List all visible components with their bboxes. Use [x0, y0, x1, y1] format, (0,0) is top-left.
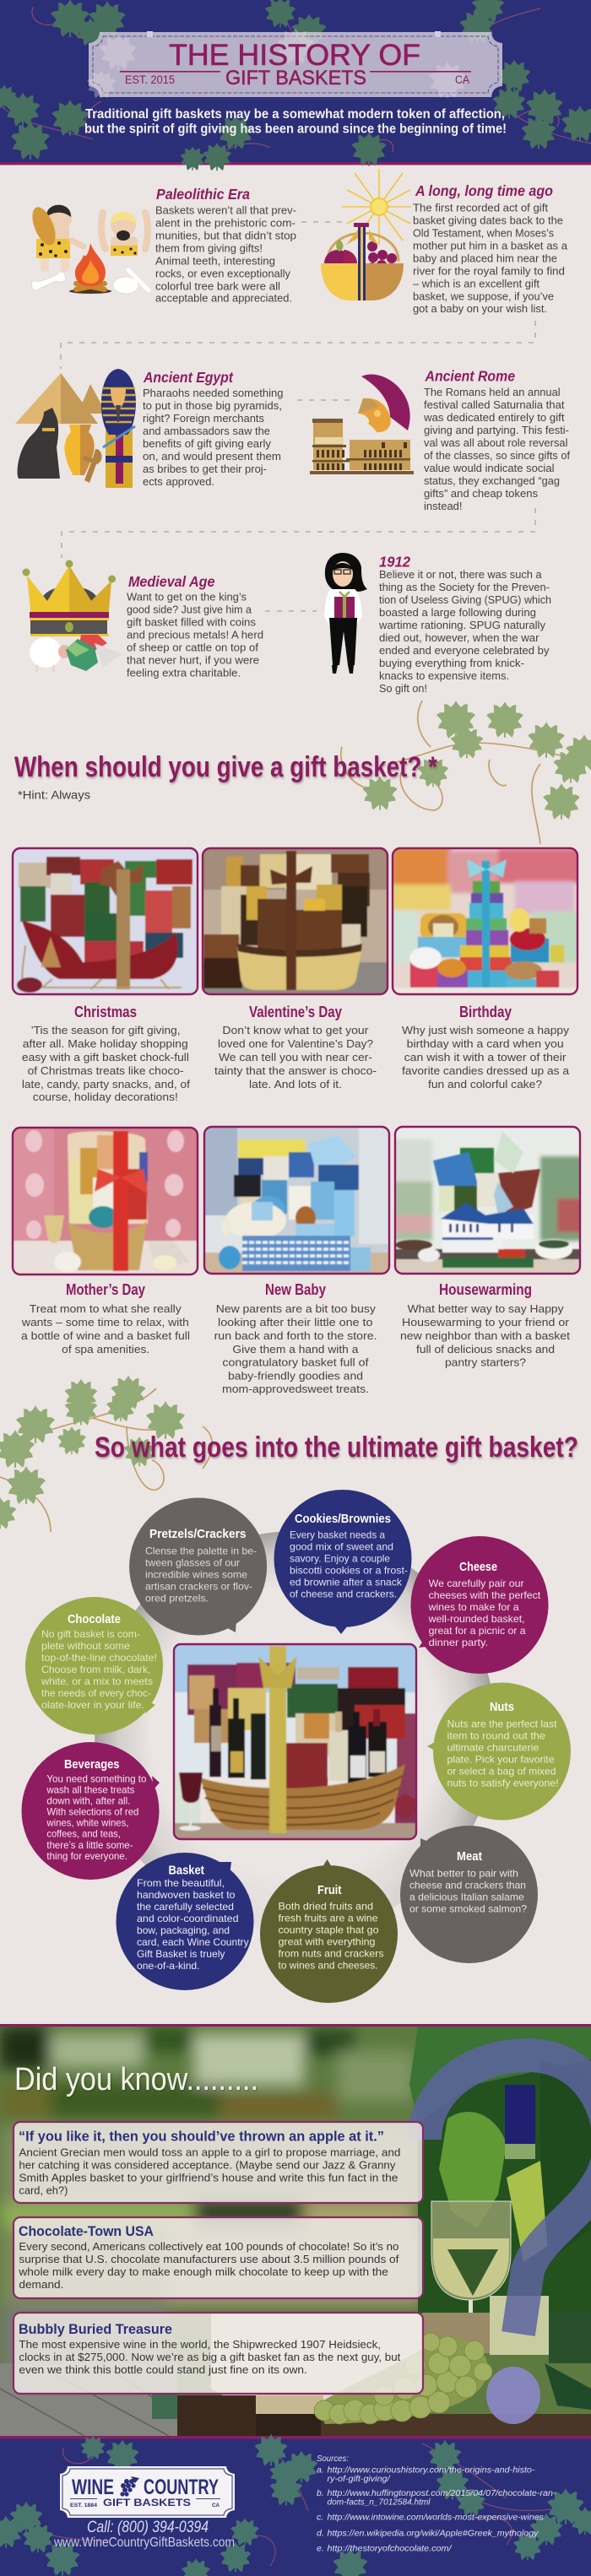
bubble: Chocolate: white, or a mix to meets	[41, 1675, 153, 1687]
text: Medieval Age: Medieval Age	[128, 573, 215, 590]
text: Christmas copy: ’Tis the season for gift giving,	[31, 1024, 181, 1036]
bubble: Pretzels/Crackers	[129, 1497, 267, 1636]
photo: vineyard background	[0, 2027, 591, 2439]
bubble: Meat: a delicious Italian salame	[409, 1891, 524, 1902]
fact card: wine: The most expensive wine in the world, the Shipwrecked 1907 Heidsieck,	[19, 2338, 381, 2351]
photo frame	[174, 1644, 416, 1839]
text: New Baby copy: New parents are a bit too busy	[216, 1302, 376, 1315]
intro text: but the spirit of gift giving has been around since the beginning of time!	[84, 122, 507, 137]
bubble: Basket: the carefully selected	[137, 1901, 234, 1913]
hint text: *Hint: Always	[18, 788, 90, 802]
caption: Christmas: Christmas	[74, 1003, 137, 1020]
bubble: Chocolate: Chocolate	[68, 1612, 121, 1626]
caption: New Baby: New Baby	[265, 1280, 327, 1298]
bubble: Beverages: coffees, and teas,	[46, 1828, 121, 1840]
icon: woman holding gift	[324, 553, 367, 674]
bubble: Cheese: Cheese	[459, 1560, 497, 1574]
icon: cavemen and fire	[28, 204, 149, 294]
panel: header	[0, 0, 591, 170]
text: Ancient Rome: instead!	[424, 501, 463, 512]
text: Christmas copy: of Christmas treats like choco-	[28, 1064, 184, 1077]
sources list: http://www.intowine.com/worlds-most-expensive-wines	[328, 2513, 545, 2523]
fact card: chocolate: whole milk every day to make enough milk chocolate to keep up with the	[18, 2265, 388, 2278]
title text	[120, 39, 471, 89]
bubble: Beverages: wines, white wines,	[46, 1817, 128, 1829]
text: Birthday copy: Why just wish someone a happy	[402, 1024, 570, 1036]
text: New Baby copy: run back and forth to the store.	[214, 1329, 377, 1342]
text: Ancient Rome: Ancient Rome	[425, 368, 515, 385]
bubble: Basket: bow, packaging, and	[137, 1924, 230, 1936]
text: Housewarming copy: pantry starters?	[445, 1356, 526, 1369]
text: Valentine's copy: loved one for Valentine’s Day?	[218, 1037, 373, 1050]
bubble: Meat	[400, 1826, 538, 1963]
bubble: Cheese: wines to make for a	[428, 1601, 519, 1613]
text: A long, long time ago: – which is an excellent gift	[413, 278, 540, 290]
foliage and wine bottle	[409, 2027, 591, 2363]
fact card: apple: her catching it was considered acceptance. (Maybe send our Jazz & Granny	[19, 2158, 396, 2171]
bubble: Beverages: Beverages	[64, 1757, 120, 1772]
logo plate: WINE	[72, 2476, 114, 2499]
text: Christmas copy: course, holiday decorations!	[33, 1090, 178, 1103]
bubble: Pretzels/Crackers: Clense the palette in be-	[145, 1545, 257, 1557]
bubble: Chocolate: No gift basket is com-	[41, 1628, 140, 1640]
contact phone: Call: (800) 394-0394	[87, 2519, 209, 2536]
campfire	[69, 243, 111, 294]
text: Mother's Day copy: a bottle of wine and a basket full	[21, 1329, 190, 1342]
bubble: Fruit	[260, 1859, 398, 2003]
bubble: Cookies/Brownies: ed brownie after a snack	[290, 1577, 403, 1588]
bubble: Cheese: great for a picnic or a	[429, 1625, 526, 1637]
text: Ancient Rome: giving and partying. This festi-	[424, 425, 569, 436]
text: Ancient Rome: was dedicated entirely to gift	[423, 412, 565, 424]
text: New Baby copy: baby-friendly goodies and	[228, 1370, 363, 1383]
text: 1912: wartime rationing. SPUG naturally	[378, 620, 546, 631]
bubble: Cheese: We carefully pair our	[429, 1578, 524, 1589]
bubble: Fruit: great with everything	[279, 1936, 375, 1948]
bubble: Beverages: You need something to	[46, 1773, 147, 1785]
bubble: Chocolate: the needs of every choc-	[41, 1687, 151, 1699]
text: 1912: buying everything from knick-	[379, 658, 524, 669]
bubble: Fruit: fresh fruits are a wine	[279, 1913, 378, 1924]
text: Ancient Rome: of the classes, so since gifts of	[424, 450, 571, 462]
text: Medieval Age: that never hurt, if you were	[127, 655, 259, 667]
top divider	[0, 2024, 591, 2027]
panel: ultimate basket diagram	[22, 1490, 571, 2003]
fact card: apple: Ancient Grecian men would toss an apple to a girl to propose marriage, and	[19, 2146, 400, 2158]
text: Housewarming copy: What better way to say Happy	[408, 1302, 564, 1315]
title text: THE HISTORY OF	[169, 39, 420, 72]
text: Birthday copy	[402, 1024, 570, 1090]
text: Ancient Rome: festival called Saturnalia that	[424, 399, 565, 411]
decorative vines on navy	[17, 2443, 574, 2566]
caption: Mother's Day: Mother’s Day	[66, 1280, 146, 1298]
text: Ancient Egypt: on, and would present them	[143, 451, 281, 463]
text: Birthday copy: birthday with a card when you	[407, 1037, 564, 1050]
fact card: apple: Smith Apples basket to your girlfriend’s house and write this fun fact in the	[19, 2171, 398, 2184]
text: Paleolithic Era	[155, 186, 296, 305]
text: Christmas copy: late, candy, party snacks, and, of	[22, 1078, 190, 1090]
timeline dashed connectors	[61, 222, 535, 611]
text: Paleolithic Era: Baskets weren’t all that prev-	[155, 204, 296, 216]
bubble: Cookies/Brownies: savory. Enjoy a couple	[290, 1553, 390, 1565]
bubble: Fruit: to wines and cheeses.	[279, 1960, 378, 1972]
text: A long, long time ago: got a baby on your wish list.	[413, 303, 547, 315]
bubble: Meat: Meat	[457, 1849, 482, 1864]
bubble: Basket: one-of-a-kind.	[137, 1960, 199, 1972]
contact website: www.WineCountryGiftBaskets.com	[53, 2535, 235, 2550]
text: Ancient Rome: The Romans held an annual	[424, 387, 561, 398]
text: 1912	[378, 554, 551, 695]
photo: central wine and gourmet basket	[173, 1643, 418, 1840]
sources list: http://www.huffingtonpost.com/2015/04/07/chocolate-ran-	[328, 2488, 556, 2498]
icon: crown, sheep and gems	[22, 560, 122, 672]
bubble: Cookies/Brownies: of cheese and crackers.	[290, 1588, 397, 1600]
title text: CA	[455, 73, 469, 86]
bubble: Basket: Basket	[169, 1864, 204, 1878]
text: Ancient Rome	[423, 368, 571, 512]
photo frame	[203, 848, 388, 994]
sources list: e.	[317, 2544, 324, 2554]
bubble: Cookies/Brownies: good mix of sweet and	[290, 1541, 393, 1553]
bubble: Beverages: there’s a little some-	[46, 1839, 133, 1851]
caption: Housewarming: Housewarming	[439, 1280, 532, 1298]
sources list: c.	[317, 2513, 323, 2523]
bubble: Nuts: Nuts are the perfect last	[447, 1718, 557, 1730]
text: Housewarming copy	[400, 1302, 570, 1369]
text: Medieval Age: feeling extra charitable.	[127, 668, 241, 679]
sources list: d.	[317, 2528, 324, 2538]
fact card: apple: card, eh?)	[19, 2184, 68, 2196]
fact card: apple: “If you like it, then you should’ve thrown an apple at it.”	[19, 2129, 384, 2145]
grapes	[314, 2333, 492, 2424]
text: Valentine's copy: late. And lots of it.	[249, 1078, 342, 1090]
text: A long, long time ago: The first recorded act of gift	[413, 203, 549, 214]
question mark overlay	[425, 2055, 591, 2334]
photo frame	[13, 848, 198, 994]
text: Mother's Day copy	[21, 1302, 190, 1356]
bubble: Meat: cheese and crackers than	[409, 1879, 526, 1891]
fact card: wine	[14, 2313, 423, 2394]
intro text: Traditional gift baskets may be a somewhat modern token of affection,	[85, 107, 505, 122]
text: Ancient Egypt: Pharaohs needed something	[143, 387, 284, 399]
photo: Christmas sleigh	[12, 847, 199, 996]
text: Ancient Rome: status, they exchanged “gag	[424, 475, 560, 487]
text: Medieval Age: gift basket filled with coins	[127, 617, 256, 629]
text: 1912: knacks to expensive items.	[379, 670, 509, 682]
sources list: b.	[317, 2488, 324, 2498]
decorative vines on navy	[0, 0, 591, 162]
wine glass	[431, 2201, 511, 2313]
sources list: ry-of-gift-giving/	[328, 2474, 391, 2484]
bubble: Chocolate: olate-lover in your life.	[41, 1699, 144, 1711]
bubble: Meat: or some smoked salmon?	[409, 1902, 527, 1914]
sources list: http://thestoryofchocolate.com/	[328, 2544, 453, 2554]
text: Medieval Age: of sheep or cattle on top of	[127, 642, 259, 654]
bubble: Basket: Gift Basket is truely	[137, 1948, 225, 1960]
text: Christmas copy	[22, 1024, 190, 1103]
text: 1912: tion of Useless Giving (SPUG) which	[379, 594, 551, 606]
caption: Valentine's Day: Valentine’s Day	[249, 1003, 343, 1020]
text: Christmas copy: after all. Make holiday shopping	[23, 1037, 188, 1050]
text: A long, long time ago: basket, we suppose, if you’ve	[413, 290, 554, 302]
fact card: chocolate: Chocolate-Town USA	[19, 2223, 154, 2239]
text: Ancient Egypt	[143, 369, 284, 488]
text: Paleolithic Era: colorful tree bark were all	[155, 280, 280, 292]
text: 1912: thing as the Society for the Preven-	[379, 582, 550, 593]
text: Paleolithic Era: munities, but that didn’t stop	[155, 230, 296, 241]
panel: history timeline	[15, 169, 571, 695]
bubble: Nuts: or select a bag of mixed	[447, 1766, 556, 1778]
bubble: Nuts: item to round out the	[447, 1730, 545, 1742]
fact card: wine: even we think this bottle could stand just fine on its own.	[19, 2363, 307, 2376]
ring shadow behind bubbles	[84, 1531, 507, 1941]
text: Paleolithic Era: them from giving gifts!	[155, 242, 263, 254]
text: Ancient Rome: val was all about role reversal	[424, 437, 567, 449]
text: Ancient Rome: value would indicate social	[424, 463, 554, 474]
text: New Baby copy: mom-approvedsweet treats.	[222, 1383, 369, 1395]
bubble: Fruit: country staple that go	[279, 1924, 379, 1936]
bubble: Pretzels/Crackers: Pretzels/Crackers	[149, 1527, 247, 1541]
panel: New Baby	[203, 1126, 391, 1395]
text: 1912: So gift on!	[379, 683, 427, 695]
text: New Baby copy	[214, 1302, 377, 1395]
bubble: Basket: From the beautiful,	[137, 1877, 225, 1889]
text: Ancient Egypt: to put in those big pyramids,	[143, 400, 282, 412]
text: Birthday copy: can wish it with a tower of their	[404, 1051, 567, 1063]
text: 1912: Believe it or not, there was such a	[379, 569, 542, 581]
icon: grape cluster	[120, 2476, 139, 2497]
panel: Housewarming	[394, 1126, 583, 1369]
caption: Birthday: Birthday	[459, 1003, 512, 1020]
text: Medieval Age: Want to get on the king’s	[127, 592, 247, 603]
text: Mother's Day copy: Treat mom to what she really	[30, 1302, 182, 1315]
fact card: apple	[14, 2122, 423, 2203]
purple flower over question-mark dot	[486, 2367, 540, 2424]
photo: Housewarming basket	[394, 1126, 583, 1274]
bubble: Beverages: With selections of red	[46, 1806, 138, 1818]
decorative vine top right	[341, 701, 591, 844]
title text: EST. 2015	[125, 73, 175, 86]
text: A long, long time ago: river for the royal family to find	[413, 265, 565, 277]
bubble: Cheese: cheeses with the perfect	[429, 1589, 541, 1601]
text: New Baby copy: congratulatory basket full of	[222, 1356, 369, 1369]
heading: When should you give a gift basket: When should you give a gift basket? *	[14, 751, 438, 783]
panel: Birthday	[392, 847, 583, 1090]
text: Paleolithic Era: rocks, or even exceptionally	[155, 268, 291, 279]
icon: Egypt pyramids, cat, vase, pharaoh	[15, 369, 136, 488]
text: Ancient Egypt: right? Foreign merchants	[143, 413, 264, 425]
bubble: Pretzels/Crackers: incredible wines some	[145, 1569, 247, 1581]
text: 1912: ended and everyone celebrated by	[379, 645, 550, 657]
bubble: Cookies/Brownies	[274, 1490, 412, 1634]
text: Housewarming copy: Housewarming to your friend or	[402, 1316, 570, 1329]
bubble: Cookies/Brownies: Every basket needs a	[290, 1529, 385, 1541]
photo frame	[393, 848, 577, 994]
bubble: Basket: and color-coordinated	[137, 1913, 238, 1924]
bubble: Pretzels/Crackers: ored pretzels.	[145, 1593, 209, 1605]
bubble: Basket: handwoven basket to	[137, 1889, 236, 1901]
text: Medieval Age	[127, 573, 263, 679]
bones and rock	[31, 270, 149, 294]
text: Paleolithic Era: alent in the prehistoric com-	[155, 217, 296, 229]
text: A long, long time ago: Old Testament, when Moses’s	[413, 228, 554, 240]
panel: Valentine's Day	[202, 847, 389, 1090]
text: Valentine's copy	[214, 1024, 377, 1090]
bubble: Beverages: wash all these treats	[46, 1784, 134, 1796]
bubble: Pretzels/Crackers: tween glasses of our	[145, 1557, 240, 1569]
text: New Baby copy: looking after their little one to	[218, 1316, 373, 1329]
text: Medieval Age: and precious metals! A herd	[127, 630, 263, 641]
text: Ancient Egypt: ects approved.	[143, 476, 214, 488]
bubble: Fruit: Fruit	[317, 1883, 342, 1897]
sources list: dom-facts_n_7012584.html	[328, 2497, 431, 2507]
text: Ancient Rome: gifts” and cheap tokens	[424, 488, 538, 500]
text: A long, long time ago: basket giving dates back to the	[413, 215, 563, 227]
bubble: Cookies/Brownies: Cookies/Brownies	[295, 1512, 391, 1526]
bubble: Nuts: nuts to satisfy everyone!	[447, 1778, 559, 1789]
bubble: Fruit: Both dried fruits and	[279, 1901, 373, 1913]
text: Mother's Day copy: of spa amenities.	[62, 1343, 149, 1356]
text: A long, long time ago: mother put him in a basket as a	[413, 241, 567, 252]
sources list	[317, 2454, 556, 2554]
icon: basket with sun	[321, 169, 411, 300]
logo plate	[60, 2466, 235, 2518]
photo: birthday tower	[392, 847, 583, 996]
sources list: Sources:	[317, 2454, 349, 2464]
text: Birthday copy: fun and colorful cake?	[428, 1078, 542, 1090]
text: 1912: 1912	[379, 554, 410, 571]
logo plate: COUNTRY	[144, 2476, 219, 2499]
fact card: chocolate: surprise that U.S. chocolate manufacturers use about 3.5 million pounds of	[19, 2253, 399, 2265]
sources list: https://en.wikipedia.org/wiki/Apple#Greek_mythology	[328, 2528, 539, 2538]
text: Valentine's copy: Don’t know what to get your	[222, 1024, 369, 1036]
logo plate: CA	[212, 2503, 220, 2508]
text: Medieval Age: good side? Just give him a	[127, 604, 252, 616]
decorative vine left	[0, 1375, 212, 1532]
text: Mother's Day copy: wants – some time to relax, with	[21, 1316, 189, 1329]
panel: Christmas	[12, 847, 199, 1103]
logo plate: EST. 1884	[70, 2503, 98, 2508]
bubble: Cheese	[410, 1536, 549, 1674]
caveman with club	[28, 204, 84, 272]
text: Paleolithic Era: Paleolithic Era	[156, 186, 250, 203]
text: Ancient Egypt: Ancient Egypt	[143, 369, 234, 386]
bubble: Cheese: well-rounded basket,	[428, 1613, 525, 1625]
text: A long, long time ago	[413, 182, 567, 315]
bubble: Beverages: thing for everyone.	[46, 1850, 127, 1862]
text: Birthday copy: favorite candies dressed up as a	[402, 1064, 570, 1077]
intro text	[84, 107, 507, 137]
text: Ancient Egypt: benefits of gift giving early	[143, 438, 272, 450]
title plate	[87, 28, 502, 98]
bubble: Fruit: from nuts and crackers	[279, 1948, 383, 1960]
bubble: Meat: What better to pair with	[409, 1867, 518, 1879]
text: 1912: boasted a large following during	[379, 607, 536, 619]
panel: footer	[0, 2434, 591, 2576]
fact card: chocolate: demand.	[19, 2278, 63, 2291]
bubble: Nuts: ultimate charcuterie	[447, 1742, 539, 1754]
bubble: Chocolate: top-of-the-line chocolate!	[41, 1652, 157, 1664]
text: Housewarming copy: new neighbor than with a basket	[400, 1329, 570, 1342]
bubble: Chocolate: Choose from milk, dark,	[41, 1664, 150, 1675]
fact card: wine: Bubbly Buried Treasure	[19, 2321, 172, 2337]
text: A long, long time ago: baby and placed him near the	[413, 253, 557, 265]
text: Valentine's copy: We can tell you with near cer-	[219, 1051, 372, 1063]
photo frame	[204, 1127, 389, 1274]
text: Housewarming copy: full of delicious snacks and	[416, 1343, 555, 1356]
logo plate: GIFT BASKETS	[103, 2497, 191, 2508]
title text: GIFT BASKETS	[225, 67, 366, 89]
photo frame	[395, 1127, 580, 1274]
bubble: Beverages	[22, 1742, 160, 1880]
heading: Did you know: Did you know.........	[14, 2062, 258, 2097]
bubble: Nuts: Nuts	[490, 1700, 514, 1714]
caveman raising arms	[101, 212, 148, 256]
bubble: Chocolate: plete without some	[41, 1640, 130, 1652]
photo: New Baby basket	[203, 1126, 391, 1274]
text: Christmas copy: easy with a gift basket chock-full	[22, 1051, 189, 1063]
fact card: wine: clocks in at $275,000. Now we’re as big a gift basket fan as the next guy, but	[19, 2351, 401, 2363]
sources list: http://www.curioushistory.com/the-origins-and-histo-	[328, 2465, 535, 2475]
sources list: a.	[317, 2465, 324, 2475]
text: Valentine's copy: tainty that the answer is choco-	[214, 1064, 377, 1077]
text: Paleolithic Era: Animal teeth, interesting	[155, 255, 275, 267]
photo: Godiva chocolate basket	[202, 847, 389, 996]
bubble: Cookies/Brownies: biscotti cookies or a frost-	[290, 1565, 408, 1577]
photo: Mother's Day spa basket	[12, 1127, 199, 1275]
text: New Baby copy: Give them a hand with a	[232, 1343, 359, 1356]
text: 1912: died out, however, when the war	[379, 632, 539, 644]
bubble: Cheese: dinner party.	[429, 1637, 488, 1648]
bubble: Nuts	[427, 1683, 571, 1820]
text: Ancient Egypt: as bribes to get their proj-	[143, 463, 267, 475]
bubble: Basket	[117, 1853, 253, 1990]
text: Paleolithic Era: acceptable and appreciated.	[155, 293, 292, 305]
panel: did you know	[0, 2024, 591, 2439]
text: Ancient Egypt: and ambassadors saw the	[143, 425, 270, 437]
text: A long, long time ago: A long, long time ago	[415, 182, 553, 199]
bubble: Chocolate	[25, 1597, 163, 1734]
photo frame	[13, 1128, 198, 1274]
bubble: Beverages: down with, after all.	[46, 1795, 130, 1807]
fact card: chocolate: Every second, Americans collectively eat 100 pounds of chocolate! So it’s no	[19, 2240, 399, 2253]
bubble: Nuts: plate. Pick your favorite	[447, 1754, 555, 1766]
panel: Mother's Day	[12, 1127, 199, 1356]
icon: Roman helmet and Colosseum	[310, 374, 414, 474]
bubble: Pretzels/Crackers: artisan crackers or flov-	[145, 1581, 252, 1593]
bubble: Basket: card, each Wine Country	[137, 1936, 249, 1948]
fact card: chocolate	[14, 2217, 423, 2298]
